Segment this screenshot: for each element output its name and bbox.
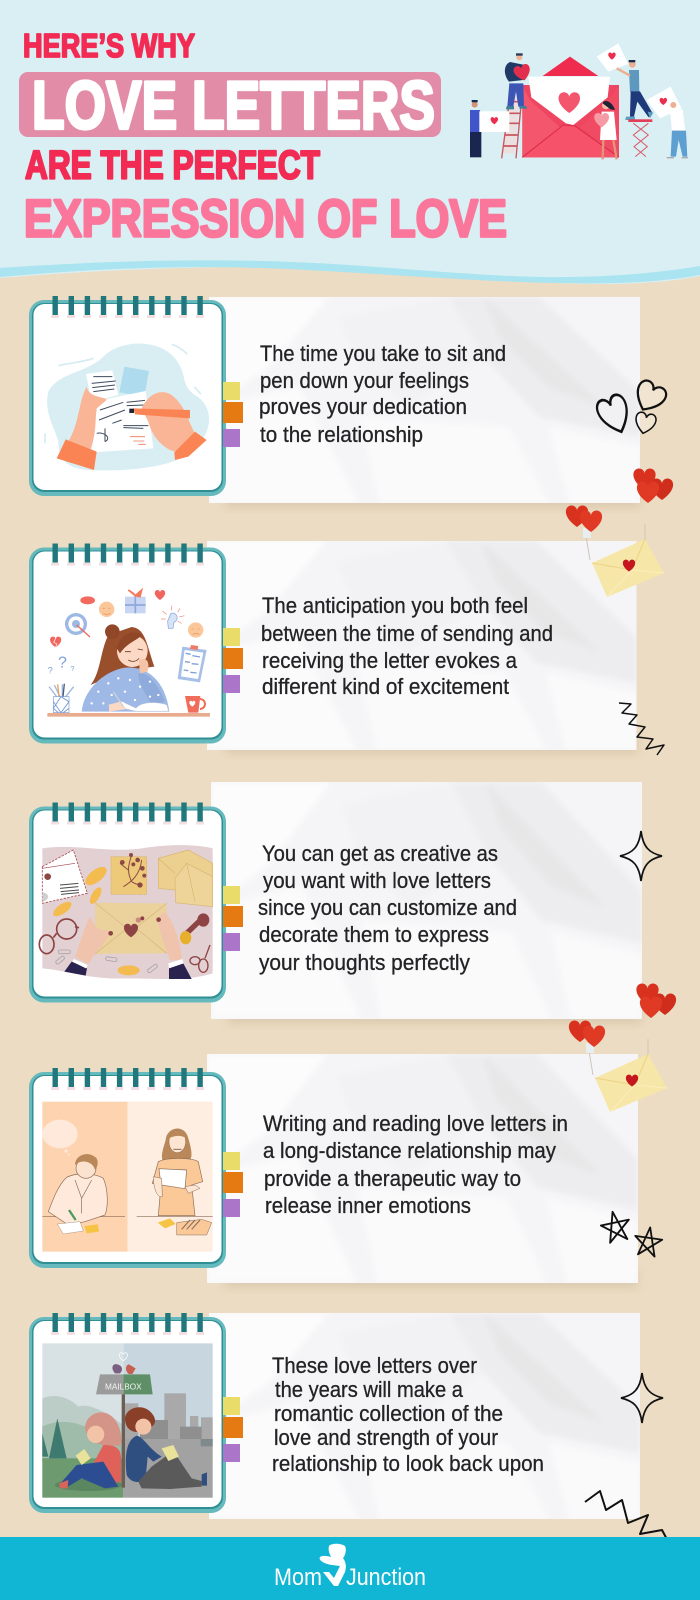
card text: your thoughts perfectly bbox=[259, 950, 471, 975]
notebook frame bbox=[29, 802, 226, 1002]
title line: here's why: HERE’S WHY bbox=[23, 27, 195, 64]
envelope bbox=[522, 57, 619, 157]
tabs bbox=[223, 1152, 243, 1217]
card text: The anticipation you both feel bbox=[262, 593, 528, 618]
title pill bbox=[19, 72, 441, 137]
panel: card 4 bbox=[29, 1054, 664, 1288]
paper background bbox=[207, 541, 638, 754]
title line: love letters: LOVE LETTERS bbox=[32, 68, 435, 144]
card text: you want with love letters bbox=[263, 868, 491, 893]
title bbox=[19, 27, 507, 248]
ladder bbox=[502, 92, 522, 158]
illustration: hands writing a letter bbox=[45, 344, 209, 470]
header band bbox=[0, 0, 700, 284]
card text: These love letters over bbox=[272, 1353, 477, 1378]
illustration: couple reading by a mailbox bbox=[42, 1343, 213, 1498]
icon: sparkle bbox=[621, 1373, 663, 1423]
man with raised card bbox=[647, 87, 688, 158]
card text: decorate them to express bbox=[259, 922, 489, 947]
card text: release inner emotions bbox=[265, 1193, 471, 1218]
illustration: girl daydreaming at desk: ? bbox=[70, 664, 74, 673]
man on ladder bbox=[505, 53, 532, 109]
card text bbox=[261, 593, 553, 699]
title line: are the perfect: ARE THE PERFECT bbox=[25, 144, 320, 188]
illustration: couple reading by a mailbox: MAILBOX bbox=[105, 1383, 142, 1392]
logo bbox=[274, 1544, 426, 1591]
card text bbox=[272, 1353, 544, 1476]
panel: card 1 bbox=[29, 296, 669, 508]
tabs bbox=[223, 382, 243, 447]
card text: different kind of excitement bbox=[262, 674, 510, 699]
header illustration: people with giant love letter bbox=[470, 43, 688, 159]
card text bbox=[259, 341, 506, 447]
logo wordmark bbox=[274, 1564, 426, 1591]
paper background bbox=[209, 297, 640, 508]
icon: outlined hearts bbox=[594, 378, 669, 437]
balloons and envelope between cards 3 and 4 bbox=[569, 983, 676, 1112]
illustration: writing and reading letters bbox=[42, 1102, 213, 1252]
man on scissor lift bbox=[597, 43, 653, 157]
icon: squiggle bbox=[585, 1491, 670, 1545]
logo wordmark: Junction bbox=[346, 1564, 426, 1591]
logo mark: mother and child bbox=[320, 1544, 346, 1586]
card text: relationship to look back upon bbox=[272, 1451, 544, 1476]
tabs bbox=[223, 1397, 243, 1462]
notebook frame bbox=[29, 296, 226, 496]
tabs bbox=[223, 628, 243, 693]
paper background bbox=[211, 782, 642, 1024]
panel: card 2 bbox=[29, 541, 664, 755]
card text: since you can customize and bbox=[258, 895, 517, 920]
paper background bbox=[207, 1054, 638, 1288]
card text: love and strength of your bbox=[274, 1425, 498, 1450]
card text: a long-distance relationship may bbox=[263, 1138, 557, 1163]
panel: card 3 bbox=[29, 782, 662, 1024]
card text: proves your dedication bbox=[259, 394, 467, 419]
illustration: decorating an envelope bbox=[39, 845, 213, 979]
card text: The time you take to sit and bbox=[260, 341, 506, 366]
logo wordmark: Mom bbox=[274, 1564, 322, 1591]
card text: romantic collection of the bbox=[274, 1401, 503, 1426]
panel: card 5 bbox=[29, 1313, 670, 1545]
tabs bbox=[223, 886, 243, 951]
card text: pen down your feelings bbox=[260, 368, 469, 393]
card text: You can get as creative as bbox=[262, 841, 498, 866]
card text bbox=[263, 1111, 568, 1218]
icon: squiggle bbox=[619, 703, 664, 755]
illustration: girl daydreaming at desk bbox=[47, 590, 210, 717]
footer bbox=[0, 1537, 700, 1600]
notebook frame bbox=[29, 1068, 226, 1268]
card text bbox=[258, 841, 517, 975]
title line: expression of love: EXPRESSION OF LOVE bbox=[24, 190, 507, 248]
notebook frame bbox=[29, 544, 226, 744]
card text: between the time of sending and bbox=[261, 621, 553, 646]
paper background bbox=[209, 1313, 640, 1519]
card text: to the relationship bbox=[260, 422, 423, 447]
illustration: girl daydreaming at desk: ? bbox=[48, 665, 53, 675]
man holding card bbox=[470, 100, 509, 157]
woman with heart bbox=[594, 101, 617, 159]
illustration: girl daydreaming at desk: ? bbox=[58, 654, 67, 671]
card text: provide a therapeutic way to bbox=[264, 1166, 521, 1191]
card text: the years will make a bbox=[275, 1377, 463, 1402]
icon: sparkle bbox=[620, 831, 662, 881]
card text: receiving the letter evokes a bbox=[262, 648, 517, 673]
card text: Writing and reading love letters in bbox=[263, 1111, 568, 1136]
balloons and envelope between cards 1 and 2 bbox=[566, 468, 673, 597]
icon: hand-drawn stars bbox=[599, 1209, 664, 1257]
notebook frame bbox=[29, 1313, 226, 1513]
